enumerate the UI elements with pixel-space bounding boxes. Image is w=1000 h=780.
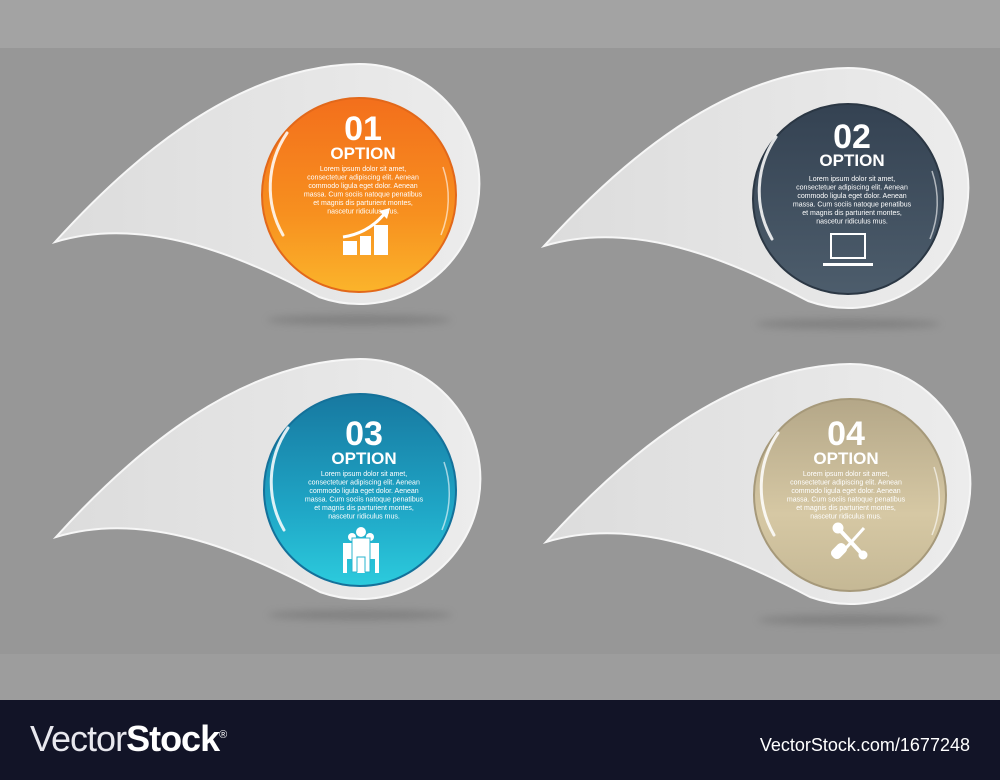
logo: VectorStock® bbox=[30, 718, 226, 759]
body text bbox=[787, 471, 906, 520]
body text: commodo ligula eget dolor. Aenean bbox=[797, 193, 907, 200]
body text: commodo ligula eget dolor. Aenean bbox=[791, 488, 901, 495]
body text bbox=[305, 471, 424, 520]
body text: nascetur ridiculus mus. bbox=[810, 514, 882, 520]
body text: consectetuer adipiscing elit. Aenean bbox=[308, 480, 420, 486]
body text: commodo ligula eget dolor. Aenean bbox=[309, 488, 419, 495]
body text: massa. Cum sociis natoque penatibus bbox=[304, 192, 423, 198]
body text bbox=[793, 176, 912, 226]
body text: et magnis dis parturient montes, bbox=[802, 210, 902, 217]
body text: nascetur ridiculus mus. bbox=[327, 208, 399, 216]
footer bbox=[0, 700, 1000, 780]
body text: et magnis dis parturient montes, bbox=[313, 200, 413, 207]
body text: consectetuer adipiscing elit. Aenean bbox=[790, 480, 902, 486]
heading: option: OPTION bbox=[819, 151, 885, 170]
body text: et magnis dis parturient montes, bbox=[796, 505, 896, 512]
option 03 bbox=[56, 359, 480, 620]
body text bbox=[304, 166, 423, 216]
body text: Lorem ipsum dolor sit amet, bbox=[320, 166, 406, 173]
body text: massa. Cum sociis natoque penatibus bbox=[793, 202, 912, 208]
body text: nascetur ridiculus mus. bbox=[328, 514, 400, 520]
heading: 01: 01 bbox=[344, 110, 382, 148]
body text: massa. Cum sociis natoque penatibus bbox=[305, 496, 424, 504]
icon: laptop bbox=[823, 234, 873, 266]
body text: nascetur ridiculus mus. bbox=[816, 218, 888, 226]
icon: people bbox=[343, 527, 379, 573]
body text: commodo ligula eget dolor. Aenean bbox=[308, 183, 418, 190]
body text: Lorem ipsum dolor sit amet, bbox=[321, 471, 407, 478]
body text: et magnis dis parturient montes, bbox=[314, 505, 414, 512]
heading: option: OPTION bbox=[813, 449, 879, 468]
body text: Lorem ipsum dolor sit amet, bbox=[809, 176, 895, 183]
heading: option: OPTION bbox=[331, 449, 397, 468]
heading: 03: 03 bbox=[345, 415, 383, 453]
body text: massa. Cum sociis natoque penatibus bbox=[787, 496, 906, 504]
option 02 bbox=[544, 68, 968, 329]
body text: consectetuer adipiscing elit. Aenean bbox=[307, 174, 419, 182]
option 04 bbox=[546, 364, 970, 625]
icon: growth chart bbox=[343, 208, 390, 255]
heading: 04: 04 bbox=[827, 415, 865, 453]
footer url: VectorStock.com/1677248 bbox=[760, 735, 970, 755]
heading: option: OPTION bbox=[330, 144, 396, 163]
heading: 02: 02 bbox=[833, 118, 871, 156]
body text: consectetuer adipiscing elit. Aenean bbox=[796, 184, 908, 192]
body text: Lorem ipsum dolor sit amet, bbox=[803, 471, 889, 478]
icon: tools bbox=[830, 523, 867, 560]
option 01 bbox=[55, 64, 479, 325]
